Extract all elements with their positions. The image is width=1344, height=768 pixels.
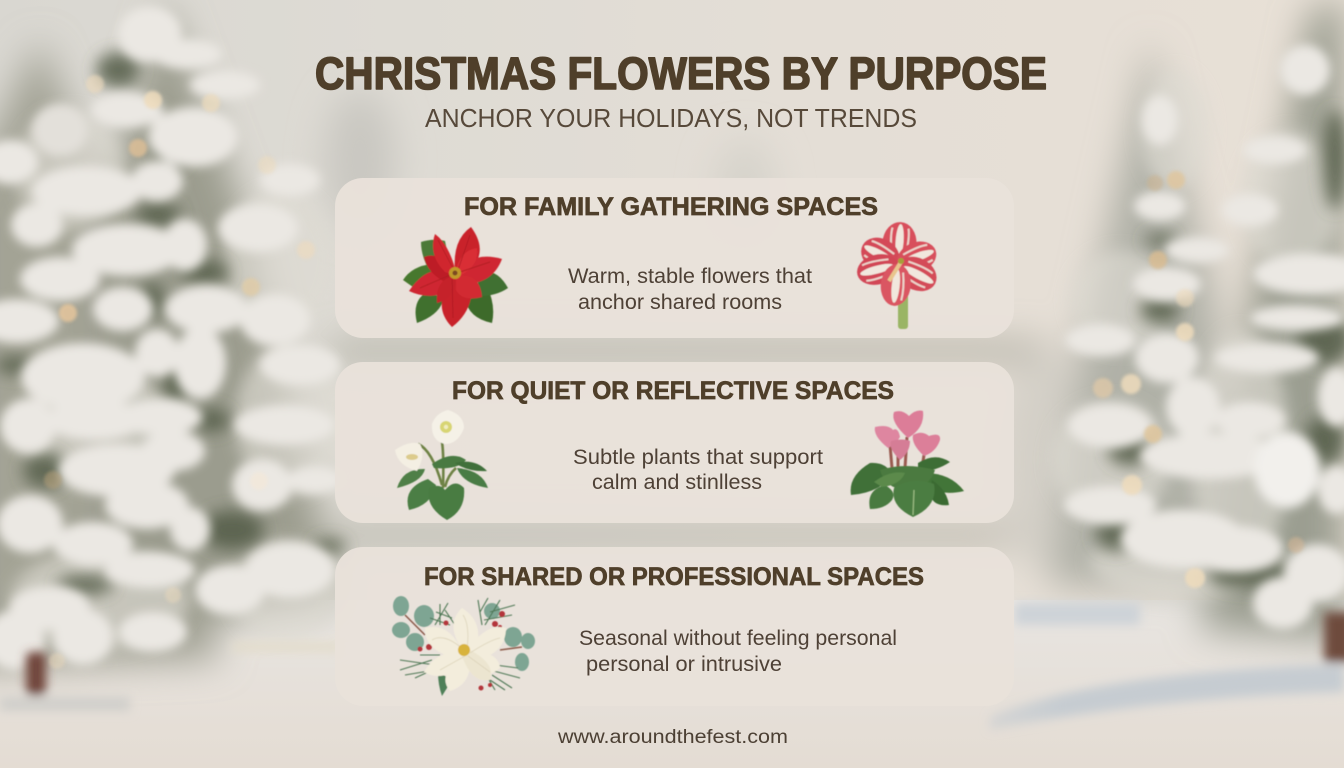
heading: family gathering: FOR FAMILY GATHERING SPACES bbox=[464, 193, 878, 221]
footer url: www.aroundthefest.com bbox=[557, 727, 788, 748]
subtitle: ANCHOR YOUR HOLIDAYS, NOT TRENDS bbox=[425, 103, 917, 133]
icon: white poinsettia bouquet bbox=[392, 596, 535, 696]
icon: hellebore bbox=[395, 410, 488, 520]
icon: cyclamen bbox=[851, 411, 964, 517]
icon: amaryllis bbox=[854, 221, 943, 329]
text: shared description: Seasonal without feeling personal bbox=[579, 627, 897, 650]
text: shared description: personal or intrusive bbox=[586, 653, 782, 676]
panel: quiet or reflective spaces bbox=[335, 362, 1014, 523]
icon: poinsettia bbox=[403, 227, 508, 327]
text: quiet description: calm and stinlless bbox=[592, 471, 762, 494]
panel: shared or professional spaces bbox=[335, 547, 1014, 706]
heading: shared or professional: FOR SHARED OR PROFESSIONAL SPACES bbox=[424, 563, 924, 591]
text: family description: anchor shared rooms bbox=[578, 291, 782, 314]
panel: family gathering spaces bbox=[335, 178, 1014, 338]
title: CHRISTMAS FLOWERS BY PURPOSE bbox=[315, 48, 1047, 99]
text: quiet description: Subtle plants that support bbox=[573, 446, 823, 469]
heading: quiet or reflective: FOR QUIET OR REFLECTIVE SPACES bbox=[452, 377, 894, 405]
text: family description: Warm, stable flowers that bbox=[568, 265, 812, 288]
